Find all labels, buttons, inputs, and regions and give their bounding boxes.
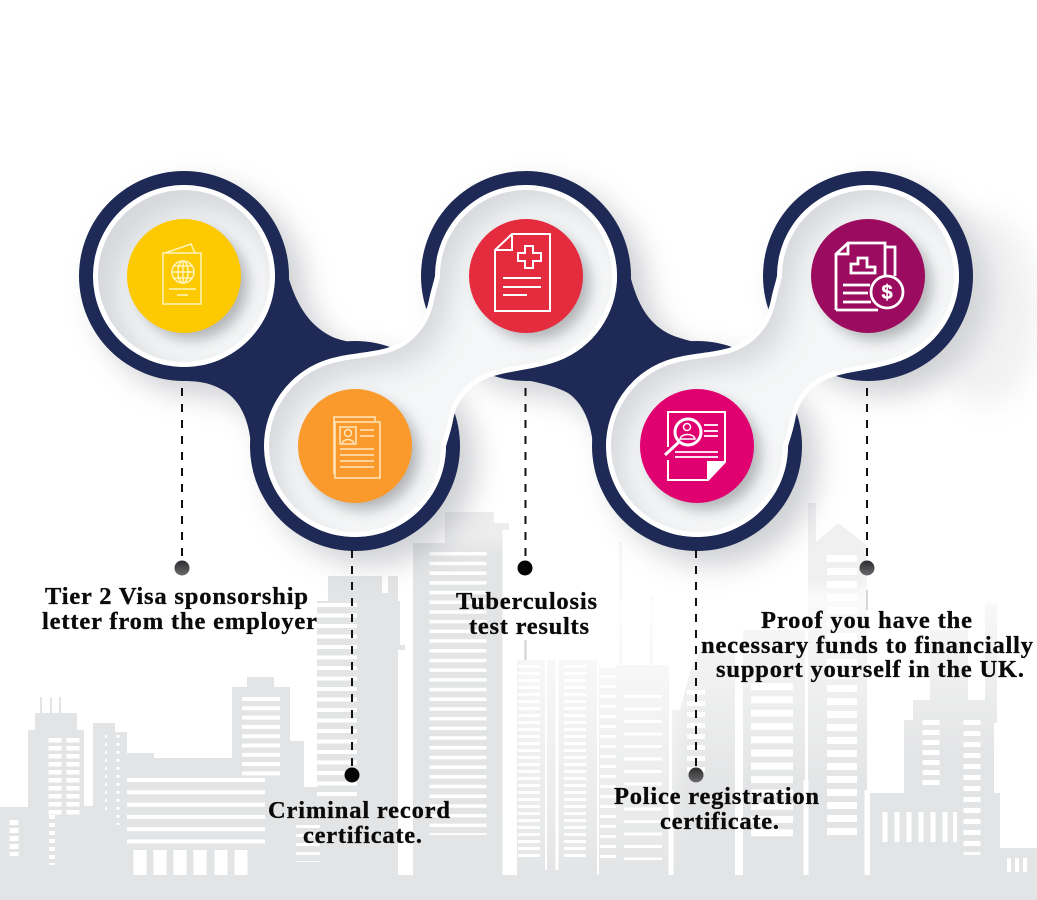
panel: S-shaped connector between discs two and three — [264, 185, 634, 554]
navy ribbon — [79, 171, 973, 551]
label: police registration — [614, 783, 819, 835]
panel: S-shaped connector between discs four and five — [606, 185, 976, 554]
faint smudge right of last disc — [930, 215, 1037, 405]
label: criminal record — [268, 797, 450, 849]
label: proof of funds — [701, 607, 1034, 683]
label: sponsorship letter — [42, 583, 317, 635]
label: sponsorship letter: letter from the employer — [42, 608, 317, 635]
leader line: tuberculosis — [518, 388, 532, 660]
soft drop shadow of the ribbon — [95, 185, 989, 565]
leader line: criminal record — [344, 550, 360, 782]
icon: financial report on purple disc: $ — [881, 282, 893, 304]
label: criminal record: Criminal record — [268, 797, 450, 824]
panel: first white disc — [93, 185, 283, 375]
icon: financial report on purple disc — [811, 219, 925, 333]
leader line: police registration — [688, 550, 704, 782]
label: tuberculosis: test results — [469, 613, 589, 640]
icon: passport on yellow disc — [127, 219, 241, 333]
label: police registration: Police registration — [614, 783, 819, 810]
label: sponsorship letter: Tier 2 Visa sponsorship — [45, 583, 308, 610]
background skyline — [0, 503, 1037, 900]
label: tuberculosis — [456, 588, 597, 640]
leader line: proof of funds — [860, 388, 874, 610]
label: tuberculosis: Tuberculosis — [456, 588, 597, 615]
icon: police record search on magenta disc — [640, 389, 754, 503]
coloured disc shadows — [136, 228, 932, 510]
leader line: sponsorship letter — [174, 388, 190, 576]
label: proof of funds: necessary funds to financially — [701, 632, 1034, 659]
label: criminal record: certificate. — [303, 822, 422, 849]
icon: identity documents on orange disc — [298, 389, 412, 503]
label: proof of funds: Proof you have the — [761, 607, 972, 634]
icon: medical report on red disc — [469, 219, 583, 333]
label: police registration: certificate. — [660, 808, 779, 835]
skyline fade overlays — [440, 480, 1037, 860]
label: proof of funds: support yourself in the UK. — [716, 656, 1024, 683]
